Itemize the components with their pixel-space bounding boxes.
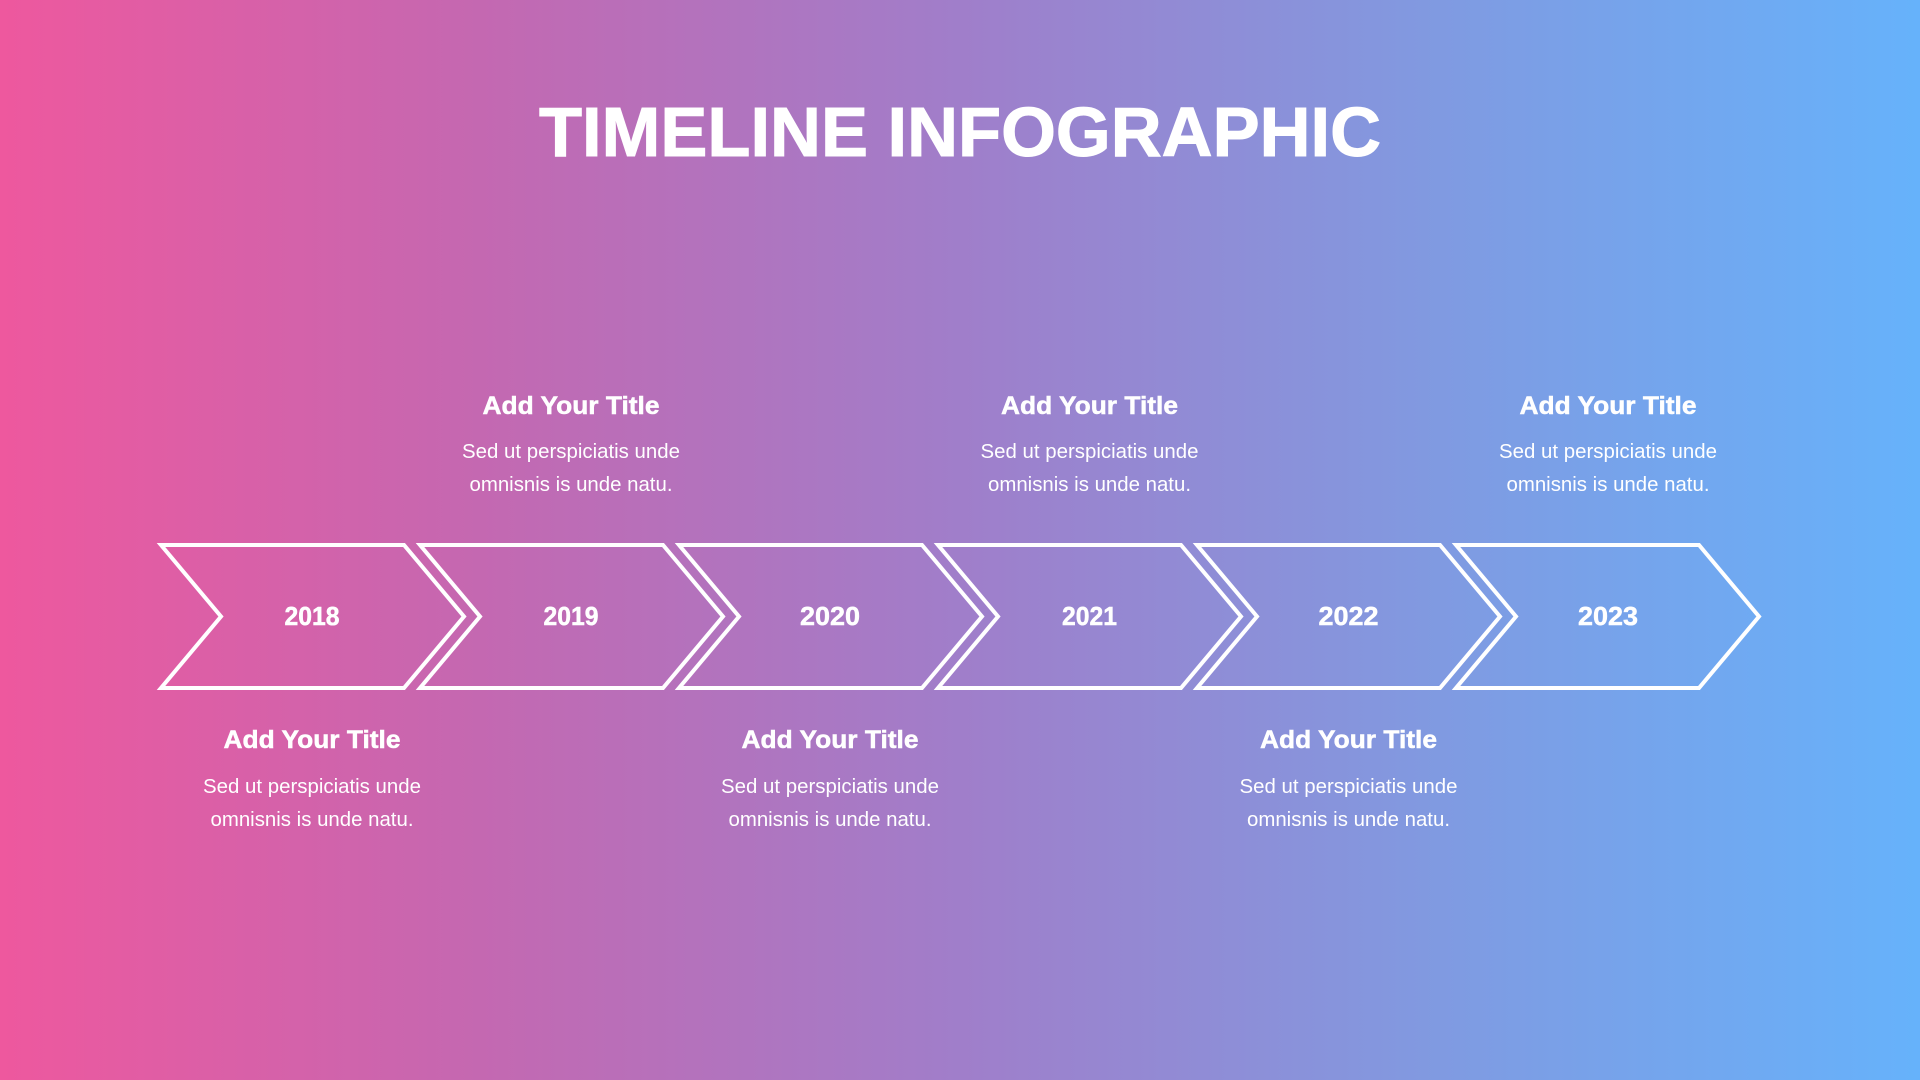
chevron: 2021: 2021 [1062,601,1117,631]
chevron: 2018 [161,545,464,688]
text block: 2022: omnisnis is unde natu. [1247,809,1450,831]
chevron: 2022 [1197,545,1500,688]
chevron: 2019 [420,545,723,688]
text block: 2020: Add Your Title [742,726,919,754]
text block: 2022: Add Your Title [1260,726,1437,754]
text block: 2021: omnisnis is unde natu. [988,474,1191,496]
chevron: 2018: 2018 [284,601,340,631]
chevron: 2019: 2019 [544,601,598,631]
chevron: 2023: 2023 [1578,601,1638,631]
text block: 2022 [1240,726,1458,831]
text block: 2023: Add Your Title [1520,392,1697,420]
text block: 2021: Sed ut perspiciatis unde [980,441,1198,463]
text block: 2018: Sed ut perspiciatis unde [203,776,421,798]
text block: 2021 [980,392,1198,496]
chevron: 2021 [938,545,1241,688]
text block: 2022: Sed ut perspiciatis unde [1240,776,1458,798]
text block: 2019: Add Your Title [482,392,660,420]
timeline chevrons [161,545,1759,688]
title: TIMELINE INFOGRAPHIC [539,93,1381,171]
text block: 2023: Sed ut perspiciatis unde [1499,441,1717,463]
chevron: 2020: 2020 [800,601,860,631]
chevron: 2022: 2022 [1318,601,1378,631]
text block: 2019 [462,392,680,496]
text block: 2018 [203,726,421,831]
text block: 2019: Sed ut perspiciatis unde [462,441,680,463]
text block: 2020 [721,726,939,831]
chevron: 2020 [679,545,982,688]
text block: 2023 [1499,392,1717,496]
text block: 2020: Sed ut perspiciatis unde [721,776,939,798]
text block: 2020: omnisnis is unde natu. [728,809,932,831]
text block: 2018: Add Your Title [224,726,401,754]
text block: 2023: omnisnis is unde natu. [1506,474,1710,496]
chevron: 2023 [1456,545,1759,688]
text block: 2018: omnisnis is unde natu. [210,809,414,831]
text block: 2019: omnisnis is unde natu. [470,474,672,496]
text block: 2021: Add Your Title [1001,392,1178,420]
